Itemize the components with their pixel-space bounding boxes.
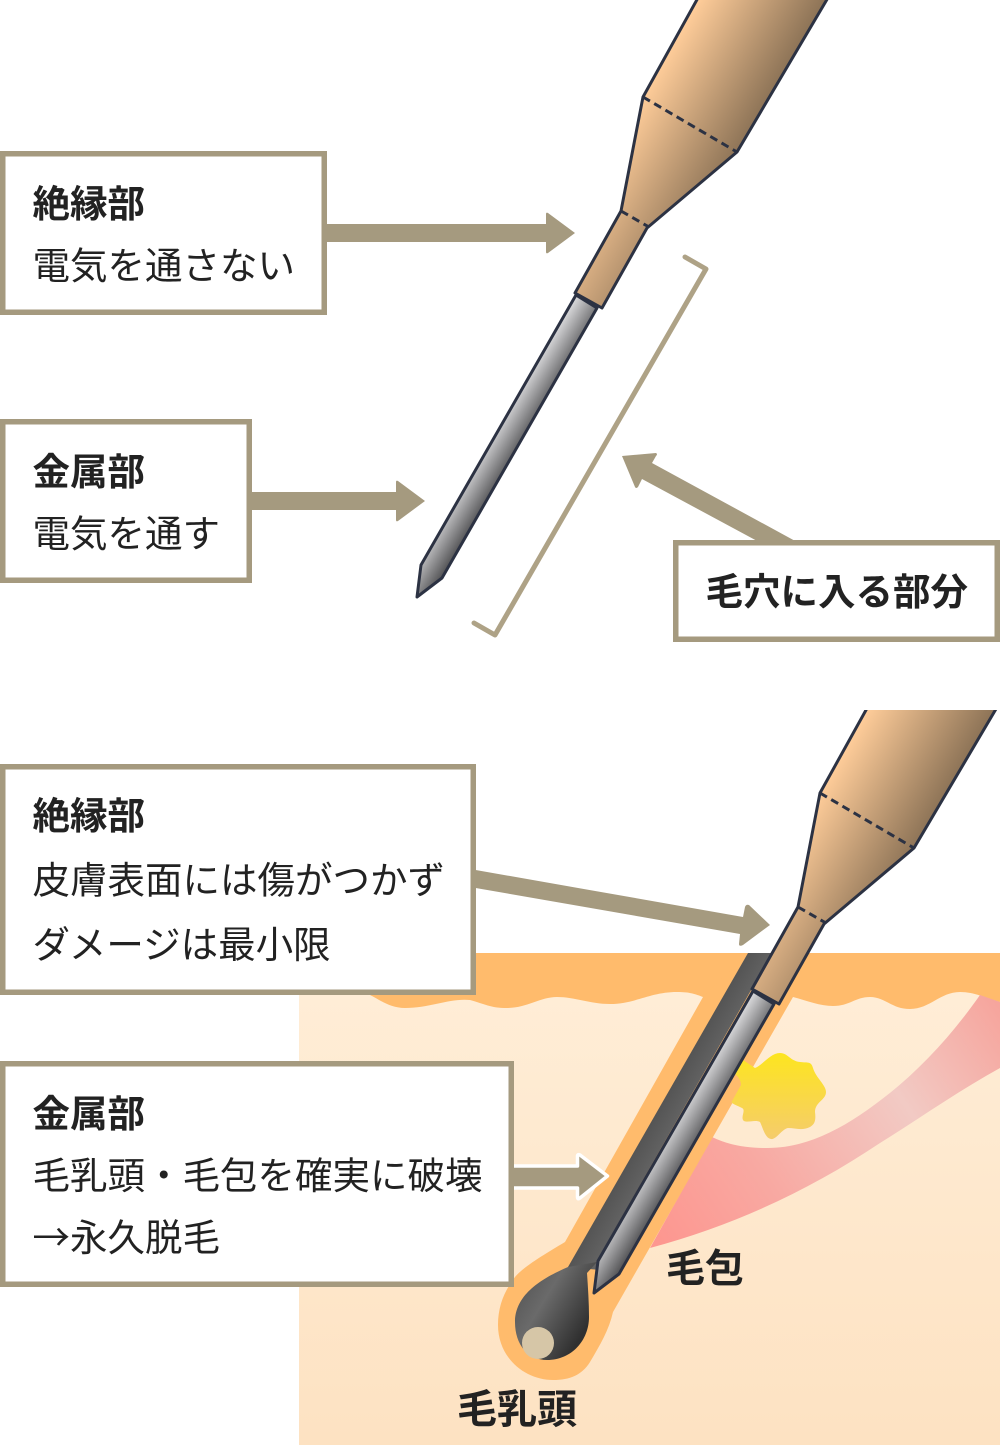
box: part entering pore: 毛穴に入る部分 bbox=[706, 571, 968, 613]
arrow: pore part bbox=[622, 453, 797, 542]
box: metal, permanent hair removal: →永久脱毛 bbox=[32, 1207, 220, 1262]
box: metal, permanent hair removal: 毛乳頭・毛包を確実に破壊 bbox=[32, 1155, 482, 1197]
box: metal, permanent hair removal bbox=[3, 1064, 511, 1284]
box: insulator: 電気を通さない bbox=[32, 245, 295, 287]
dermal papilla bbox=[522, 1327, 554, 1359]
bracket: part entering pore bbox=[474, 257, 706, 635]
box: insulator, no skin damage: 皮膚表面には傷がつかず bbox=[32, 860, 445, 902]
pink muscle bbox=[650, 995, 1000, 1248]
follicle sheath bbox=[498, 953, 793, 1380]
arrow: insulator on skin bbox=[470, 869, 770, 946]
arrow: insulator bbox=[326, 213, 575, 253]
box: insulator, no skin damage bbox=[3, 767, 473, 992]
box: part entering pore bbox=[676, 543, 997, 639]
needle metal part bbox=[417, 295, 597, 597]
needle diagram: upper bbox=[417, 0, 829, 597]
label: dermal papilla: 毛乳頭 bbox=[457, 1388, 577, 1432]
hair bbox=[515, 953, 775, 1360]
sheath overlap on gland bbox=[690, 1070, 741, 1137]
box: metal: 金属部 bbox=[32, 451, 145, 493]
orange gap line bbox=[597, 990, 752, 1262]
epidermis bbox=[299, 953, 1000, 1009]
needle insulated part bbox=[575, 0, 829, 308]
sebaceous gland bbox=[725, 1053, 826, 1139]
box: metal: 電気を通す bbox=[32, 513, 220, 555]
box: insulator, no skin damage: ダメージは最小限 bbox=[32, 924, 331, 966]
label: hair follicle: 毛包 bbox=[666, 1248, 744, 1291]
box: metal, permanent hair removal: 金属部 bbox=[32, 1093, 145, 1135]
needle metal part bbox=[594, 991, 774, 1293]
box: insulator: 絶縁部 bbox=[32, 183, 145, 225]
needle inserted into follicle bbox=[594, 692, 1000, 1293]
box: insulator, no skin damage: 絶縁部 bbox=[32, 795, 145, 837]
needle insulated part bbox=[752, 692, 1000, 1004]
box: metal bbox=[3, 422, 249, 580]
arrow: metal destroys follicle bbox=[512, 1155, 608, 1199]
skin cross-section bbox=[299, 953, 1000, 1445]
dermis bbox=[299, 953, 1000, 1445]
hair bulb bbox=[515, 1262, 597, 1360]
box: insulator bbox=[3, 154, 324, 312]
arrow: metal bbox=[250, 481, 425, 521]
